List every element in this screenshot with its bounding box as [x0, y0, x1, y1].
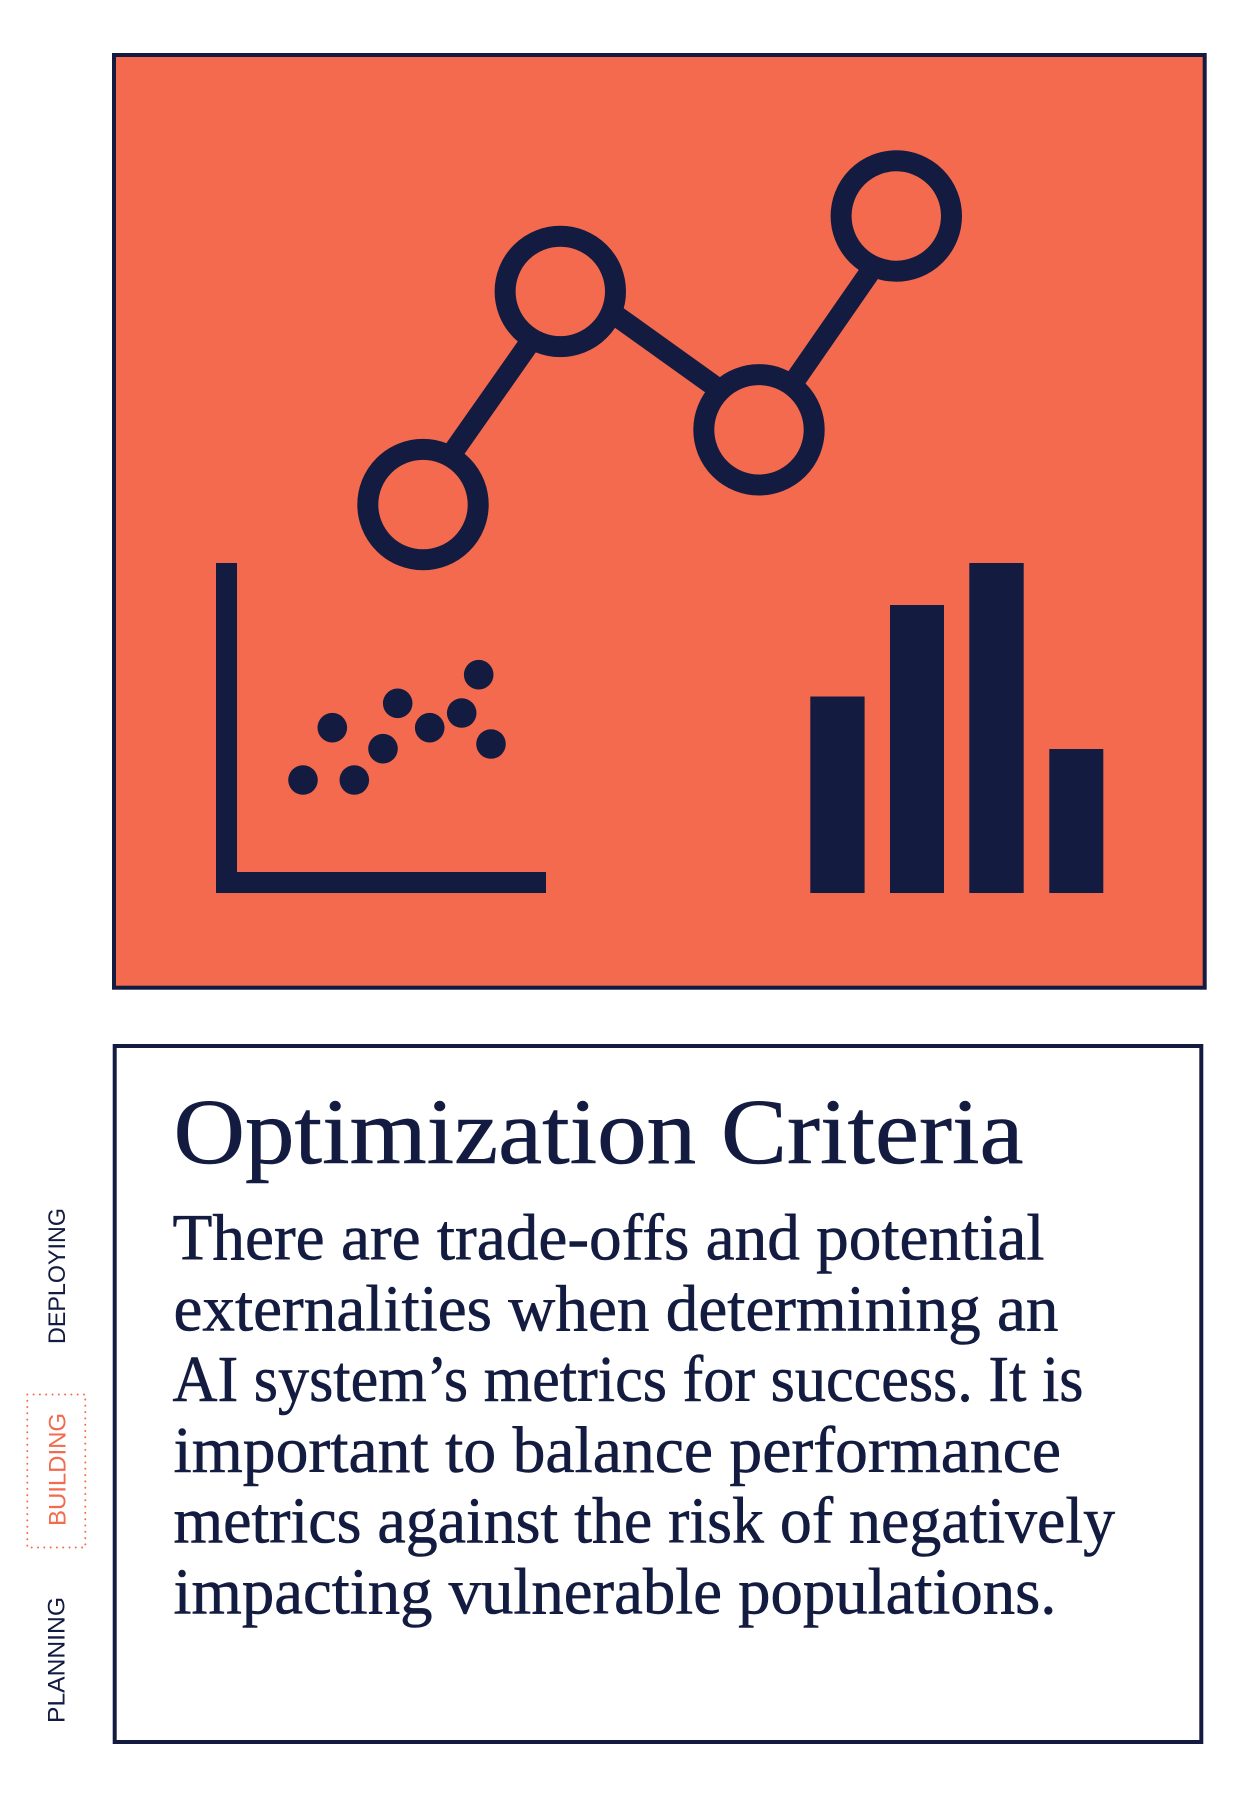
panel: text box — [115, 1046, 1201, 1742]
text block: description: impacting vulnerable populations. — [174, 1556, 1056, 1628]
text block: description: metrics against the risk of negatively — [174, 1485, 1115, 1558]
icon: bar chart — [810, 563, 1103, 893]
text block: description: There are trade-offs and potential — [172, 1202, 1044, 1274]
text block: description: important to balance performance — [174, 1414, 1061, 1487]
icon: line chart with circular nodes — [368, 161, 952, 560]
label: building: BUILDING — [44, 1413, 72, 1526]
label: deploying: DEPLOYING — [44, 1208, 71, 1344]
text block: description: externalities when determining an — [174, 1272, 1058, 1345]
heading: Optimization Criteria — [174, 1081, 1024, 1184]
highlight: dotted frame around building — [27, 1394, 85, 1548]
text block: description — [172, 1202, 1115, 1628]
panel: illustration — [114, 55, 1205, 988]
icon: scatter plot — [216, 563, 546, 893]
text block: description: AI system’s metrics for success. It is — [172, 1343, 1084, 1416]
label: planning: PLANNING — [43, 1597, 70, 1723]
side navigation: stages — [27, 1208, 85, 1723]
